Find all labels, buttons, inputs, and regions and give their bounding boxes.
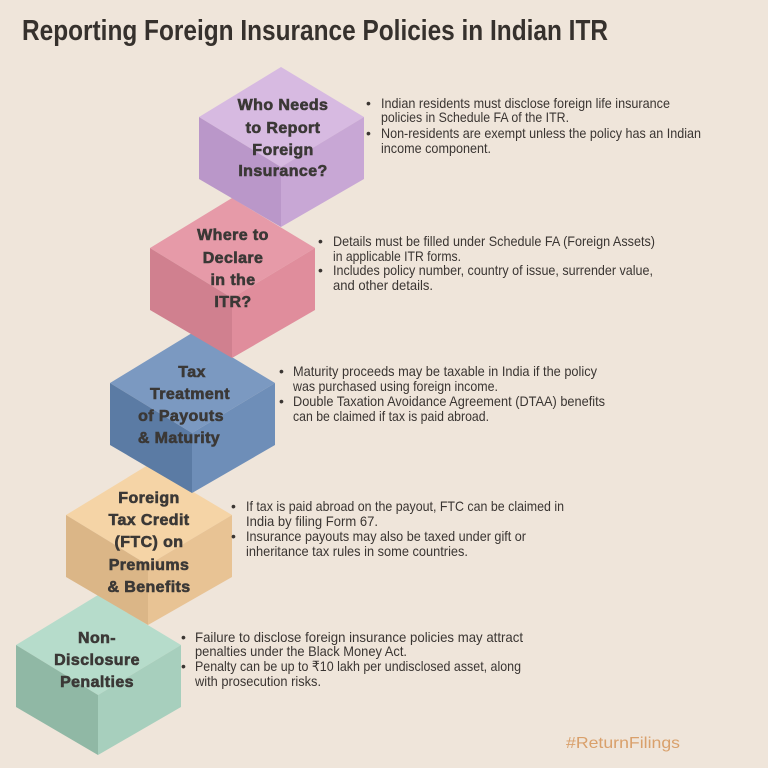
text block 1: policies in Schedule FA of the ITR.	[381, 109, 569, 125]
text block 4: inheritance tax rules in some countries.	[246, 543, 468, 559]
text block 5: •	[181, 629, 186, 645]
cube 4: FTC: (FTC) on	[115, 534, 183, 551]
cube 4: FTC: & Benefits	[107, 579, 191, 596]
text block 4: •	[231, 528, 236, 544]
text block 2: Includes policy number, country of issue, surrender value,	[333, 262, 653, 278]
cube 4: FTC	[66, 465, 232, 625]
cube 3: tax treatment: Treatment	[150, 386, 230, 403]
text block 1: Indian residents must disclose foreign life insurance	[381, 95, 670, 111]
text block 1: income component.	[381, 140, 491, 156]
text block 2	[318, 233, 655, 293]
text block 4	[231, 498, 564, 559]
hashtag: #ReturnFilings	[566, 735, 680, 752]
cube 5: non-disclosure penalties: Non-	[78, 630, 116, 647]
text block 1: Non-residents are exempt unless the policy has an Indian	[381, 125, 701, 141]
cube 2: where to declare: Where to	[197, 227, 269, 244]
text block 5	[181, 629, 523, 689]
text block 3: •	[279, 393, 284, 409]
text block 1	[366, 95, 701, 156]
cube 4: FTC: Premiums	[109, 557, 189, 574]
text block 5: •	[181, 658, 186, 674]
text block 1: •	[366, 125, 371, 141]
text block 5: Failure to disclose foreign insurance policies may attract	[195, 629, 523, 645]
text block 1: •	[366, 95, 371, 111]
text block 5: Penalty can be up to ₹10 lakh per undisclosed asset, along	[195, 658, 521, 674]
cube 1: who needs to report: to Report	[246, 120, 321, 137]
text block 2: •	[318, 233, 323, 249]
cube 1: who needs to report: Who Needs	[238, 97, 328, 114]
title: Reporting Foreign Insurance Policies in Indian ITR	[22, 15, 608, 47]
text block 4: If tax is paid abroad on the payout, FTC can be claimed in	[246, 498, 564, 514]
text block 2: and other details.	[333, 277, 433, 293]
cube 3: tax treatment: & Maturity	[138, 430, 220, 447]
text block 3: •	[279, 363, 284, 379]
text block 4: •	[231, 498, 236, 514]
text block 3: was purchased using foreign income.	[292, 378, 498, 394]
cube 2: where to declare: in the	[210, 272, 256, 289]
cube 5: non-disclosure penalties	[16, 595, 181, 755]
text block 2: •	[318, 262, 323, 278]
text block 2: in applicable ITR forms.	[333, 248, 461, 264]
cube 3: tax treatment: of Payouts	[138, 408, 224, 425]
cube 2: where to declare: Declare	[203, 250, 263, 267]
cube 4: FTC: Tax Credit	[108, 512, 190, 529]
text block 2: Details must be filled under Schedule FA (Foreign Assets)	[333, 233, 655, 249]
text block 4: Insurance payouts may also be taxed under gift or	[246, 528, 526, 544]
cube 5: non-disclosure penalties: Penalties	[60, 674, 134, 691]
cube 3: tax treatment	[110, 333, 275, 493]
cube 1: who needs to report	[199, 67, 364, 227]
cube 2: where to declare: ITR?	[214, 294, 252, 311]
text block 3: can be claimed if tax is paid abroad.	[293, 408, 489, 424]
text block 4: India by filing Form 67.	[246, 513, 378, 529]
cube 1: who needs to report: Insurance?	[238, 163, 328, 180]
cube 4: FTC: Foreign	[118, 490, 180, 507]
cube 1: who needs to report: Foreign	[252, 142, 314, 159]
text block 5: with prosecution risks.	[194, 673, 321, 689]
text block 3	[279, 363, 605, 424]
cube 3: tax treatment: Tax	[178, 364, 206, 381]
text block 5: penalties under the Black Money Act.	[195, 643, 407, 659]
text block 3: Double Taxation Avoidance Agreement (DTAA) benefits	[293, 393, 605, 409]
cube 2: where to declare	[150, 198, 315, 358]
cube 5: non-disclosure penalties: Disclosure	[54, 652, 140, 669]
text block 3: Maturity proceeds may be taxable in India if the policy	[293, 363, 597, 379]
